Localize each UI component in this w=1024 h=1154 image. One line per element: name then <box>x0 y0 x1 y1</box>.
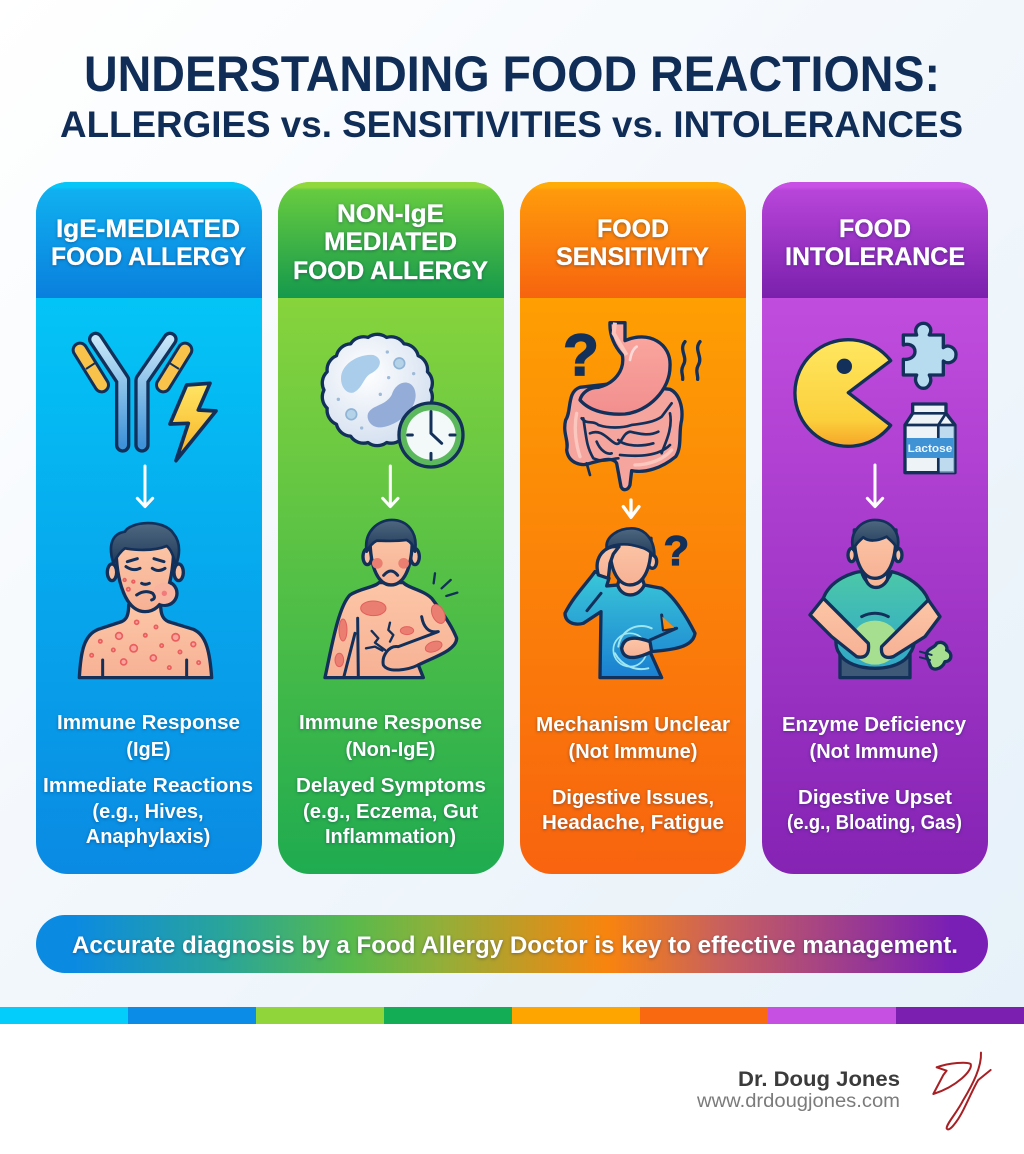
panel header: intolerance <box>762 182 988 298</box>
text: IgE symptoms: Immediate Reactions <box>43 775 253 797</box>
panel header: IgE-mediated: IgE-MEDIATED <box>56 215 240 243</box>
text: sensitivity symptoms: Headache, Fatigue <box>542 812 724 834</box>
panel header: sensitivity: FOOD <box>597 215 669 243</box>
panel: IgE-mediated food allergy <box>36 182 262 874</box>
panel header: intolerance: FOOD <box>839 215 911 243</box>
panel header: non-IgE <box>278 182 504 298</box>
panel: food sensitivity <box>520 182 746 874</box>
panel: food intolerance <box>762 182 988 874</box>
callout banner <box>36 915 988 973</box>
illustration: immune cell, clock, arrow and person with eczema <box>322 334 463 678</box>
text: non-IgE symptoms: Delayed Symptoms <box>296 775 486 797</box>
illustration: digestive system, arrow and person with headache: ? <box>664 527 689 574</box>
text: sensitivity symptoms: Mechanism Unclear <box>536 714 730 736</box>
text: IgE symptoms: Anaphylaxis) <box>86 826 210 848</box>
illustration: digestive system, arrow and person with headache <box>563 323 700 678</box>
callout banner: Accurate diagnosis by a Food Allergy Doctor is key to effective management. <box>72 932 958 959</box>
text: IgE symptoms: (IgE) <box>126 739 171 761</box>
text: non-IgE symptoms <box>296 712 486 848</box>
text: non-IgE symptoms: Immune Response <box>299 712 482 734</box>
panel header: sensitivity: SENSITIVITY <box>556 243 709 271</box>
brand name and url: Dr. Doug Jones <box>738 1068 900 1091</box>
text: non-IgE symptoms: (e.g., Eczema, Gut <box>303 801 478 823</box>
panel header: non-IgE: FOOD ALLERGY <box>293 257 488 285</box>
brand name and url <box>696 1068 900 1112</box>
text: intolerance symptoms: (Not Immune) <box>810 741 938 763</box>
panel header: non-IgE: MEDIATED <box>324 228 457 256</box>
illustration: enzyme, puzzle piece, lactose carton, arrow and person bloating: Lactose <box>908 443 952 455</box>
title: ALLERGIES vs. SENSITIVITIES vs. INTOLERANCES <box>60 104 963 145</box>
text: sensitivity symptoms: Digestive Issues, <box>552 787 714 809</box>
panel header: non-IgE: NON-IgE <box>337 200 444 228</box>
footer <box>0 1024 1024 1154</box>
panel header: sensitivity <box>520 182 746 298</box>
illustration: enzyme, puzzle piece, lactose carton, arrow and person bloating <box>795 323 956 678</box>
text: intolerance symptoms: Enzyme Deficiency <box>782 714 967 736</box>
text: intolerance symptoms <box>782 714 967 834</box>
panel header: intolerance: INTOLERANCE <box>785 243 965 271</box>
text: sensitivity symptoms: (Not Immune) <box>569 741 697 763</box>
title: UNDERSTANDING FOOD REACTIONS: <box>84 46 940 102</box>
text: intolerance symptoms: Digestive Upset <box>798 787 952 809</box>
panel header: IgE-mediated: FOOD ALLERGY <box>51 243 246 271</box>
title <box>60 46 963 145</box>
text: IgE symptoms: Immune Response <box>57 712 240 734</box>
text: IgE symptoms: (e.g., Hives, <box>92 801 204 823</box>
illustration: digestive system, arrow and person with headache: ? <box>563 323 599 388</box>
text: sensitivity symptoms <box>536 714 730 834</box>
colour stripe <box>0 1007 1024 1024</box>
signature <box>933 1053 991 1129</box>
illustration: antibody, lightning, arrow and person with hives <box>79 339 216 678</box>
text: non-IgE symptoms: (Non-IgE) <box>346 739 435 761</box>
panel: non-IgE mediated food allergy <box>278 182 504 874</box>
text: non-IgE symptoms: Inflammation) <box>325 826 456 848</box>
text: intolerance symptoms: (e.g., Bloating, Gas) <box>787 812 962 834</box>
brand name and url: www.drdougjones.com <box>696 1091 900 1112</box>
panel header: IgE-mediated <box>36 182 262 298</box>
text: IgE symptoms <box>43 712 253 848</box>
